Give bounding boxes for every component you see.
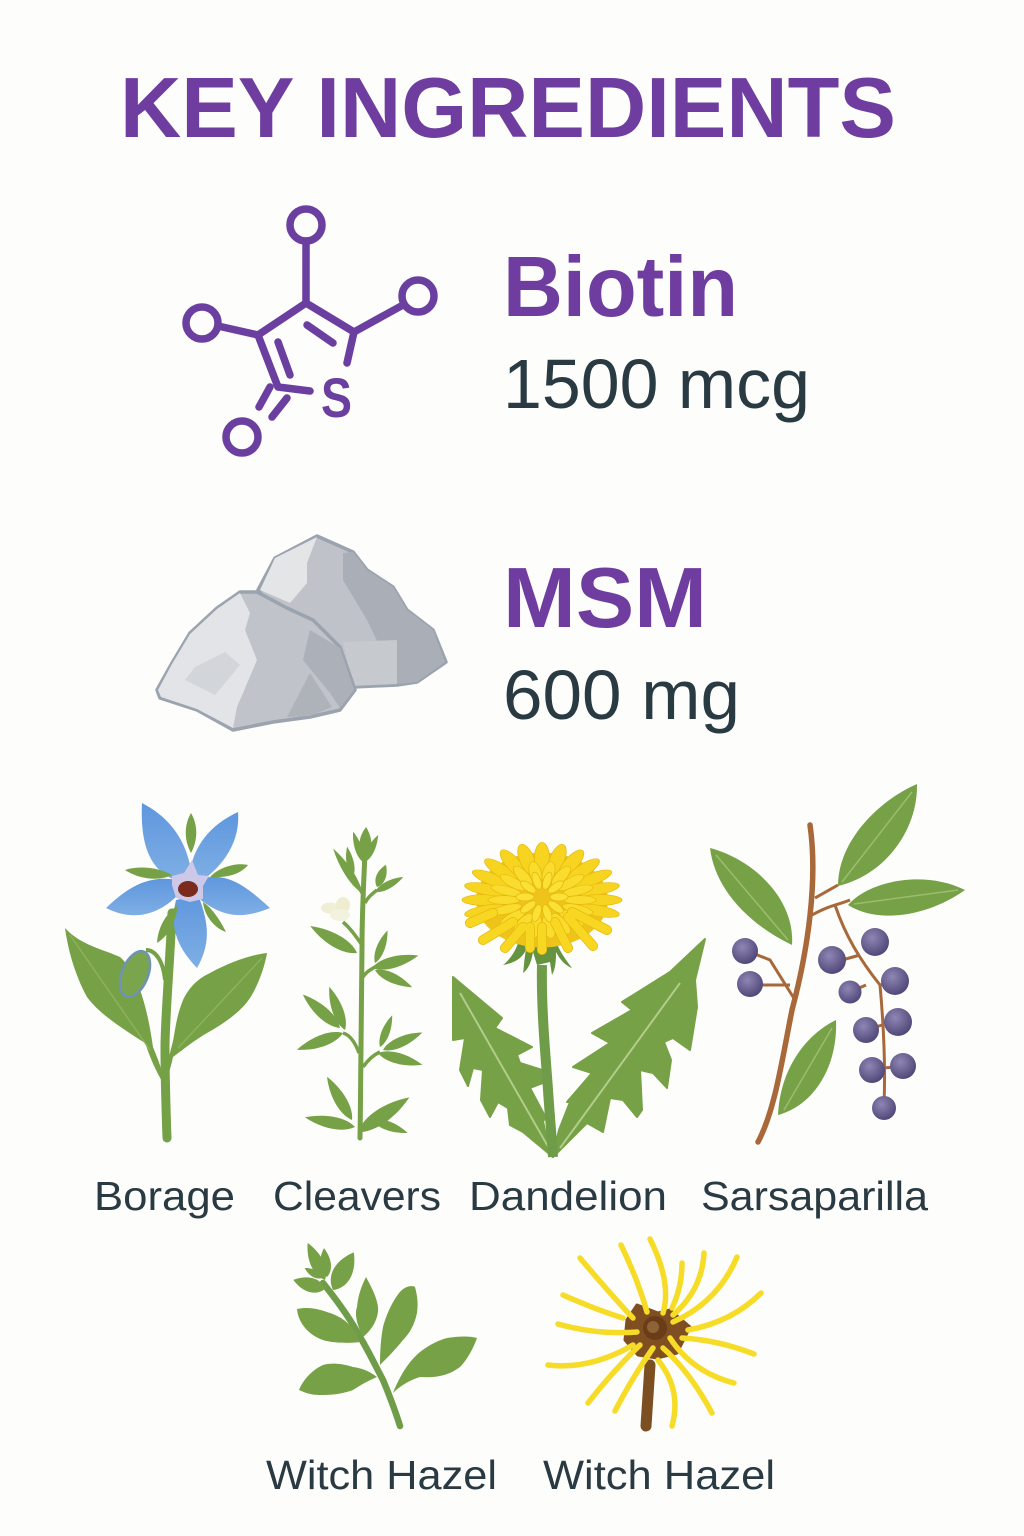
illustration: borage bbox=[65, 803, 270, 1138]
dose: MSM: 600 mg bbox=[503, 656, 740, 734]
heading: Biotin: Biotin bbox=[503, 240, 738, 335]
label: Witch Hazel (flower): Witch Hazel bbox=[543, 1452, 775, 1498]
label: Witch Hazel (leaves): Witch Hazel bbox=[266, 1452, 497, 1498]
icon: biotin molecule bbox=[186, 209, 434, 453]
title: KEY INGREDIENTS bbox=[120, 61, 896, 156]
dose: Biotin: 1500 mcg bbox=[503, 345, 810, 423]
label: Sarsaparilla: Sarsaparilla bbox=[701, 1173, 928, 1219]
label: Dandelion: Dandelion bbox=[469, 1173, 667, 1219]
illustration: cleavers bbox=[295, 827, 424, 1138]
label: Borage: Borage bbox=[94, 1173, 235, 1219]
illustration: witch hazel flower bbox=[548, 1239, 761, 1426]
heading: MSM: MSM bbox=[503, 551, 707, 646]
illustration: dandelion bbox=[453, 842, 705, 1157]
illustration: sarsaparilla bbox=[710, 784, 965, 1142]
illustration: witch hazel leaves bbox=[291, 1240, 477, 1426]
icon: biotin molecule: S bbox=[321, 366, 352, 429]
icon: MSM crystals bbox=[157, 536, 446, 730]
label: Cleavers: Cleavers bbox=[273, 1173, 441, 1219]
